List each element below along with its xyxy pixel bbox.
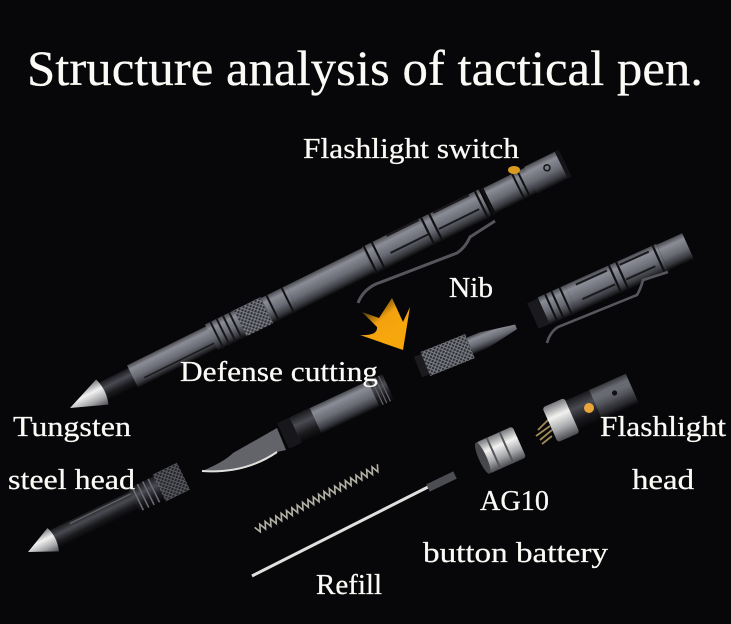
label: flashlight head [600, 412, 726, 496]
label: nib: Nib [449, 273, 493, 304]
label: AG10 button battery: button battery [423, 538, 608, 569]
flashlight switch button [508, 166, 520, 174]
pocket clip [358, 221, 495, 303]
nib [413, 315, 521, 379]
icon: tungsten tip [64, 378, 111, 421]
knife section [202, 374, 394, 471]
spring [254, 464, 381, 533]
label: tungsten steel head: Tungsten [13, 412, 131, 443]
title: Structure analysis of tactical pen. [27, 40, 703, 96]
cap clip [547, 272, 668, 343]
label: tungsten steel head: steel head [8, 465, 135, 496]
battery [472, 426, 526, 475]
icon: lower tip [22, 527, 61, 564]
flashlight LED [584, 403, 594, 413]
label: flashlight switch: Flashlight switch [303, 134, 519, 165]
label: AG10 button battery: AG10 [480, 486, 549, 517]
flashlight spring [536, 420, 552, 444]
label: flashlight head: head [632, 465, 694, 496]
label: tungsten steel head [8, 412, 135, 496]
knife blade [202, 428, 286, 471]
label: refill: Refill [316, 570, 382, 601]
tungsten head section [21, 463, 190, 565]
assembled pen [63, 150, 572, 421]
orange arrow [360, 298, 410, 350]
label: AG10 button battery [423, 486, 608, 569]
refill [252, 475, 455, 576]
cap barrel [527, 232, 694, 330]
label: defense cutting: Defense cutting [180, 357, 378, 388]
label: flashlight head: Flashlight [600, 412, 726, 443]
flashlight head [536, 371, 640, 444]
